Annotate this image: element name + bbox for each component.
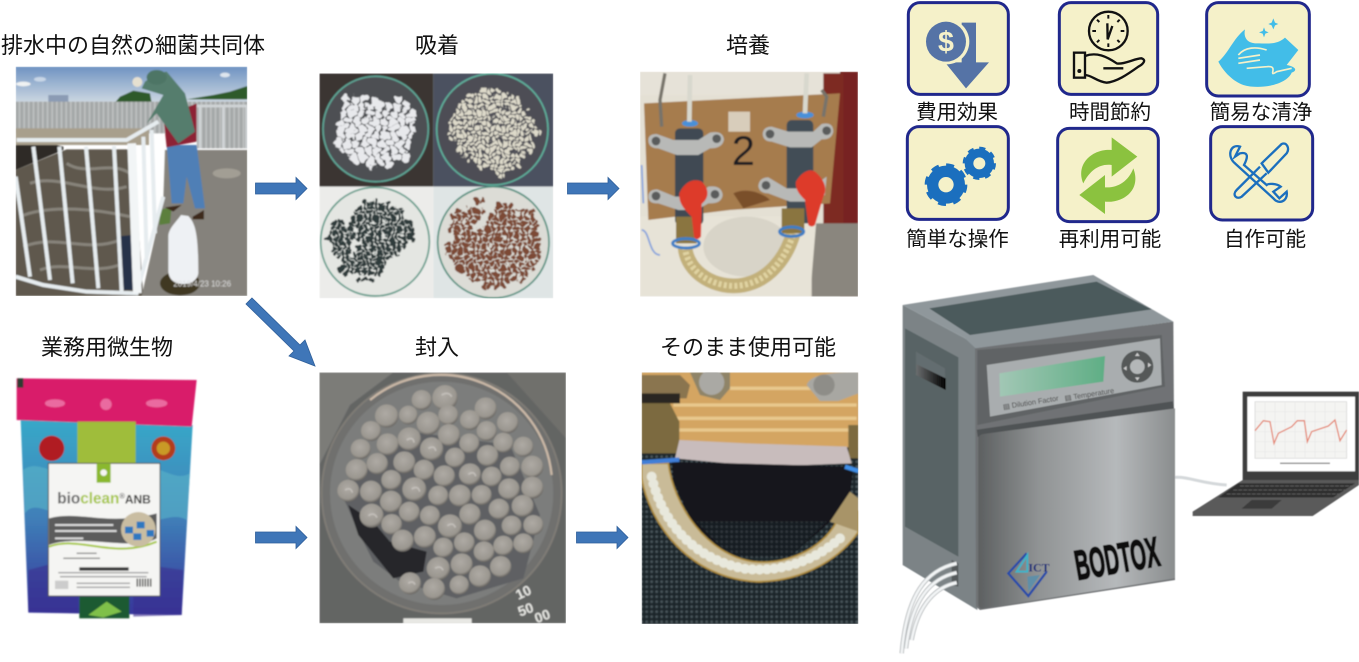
date stamp: 2019/4/23 10:26 [173, 280, 232, 289]
photo: four petri dishes of carrier media [319, 73, 553, 298]
indicator labels: ▤ Dilution Factor [1002, 394, 1060, 411]
product name: ANB [125, 492, 151, 506]
illustration: BODTOX analyser connected to laptop [902, 275, 1359, 653]
icon: reusable [1058, 128, 1158, 222]
beaker graduation marks: 50 [516, 599, 536, 619]
control panel [977, 335, 1165, 425]
device top [903, 275, 1173, 350]
icon: easy cleaning [1207, 3, 1309, 96]
beaker graduation marks: 00 [532, 606, 553, 626]
icon: cost effective [908, 3, 1008, 94]
icon: cost effective: $ [938, 27, 954, 59]
label: time saving: 時間節約 [1069, 101, 1151, 124]
label: simple operation: 簡単な操作 [906, 228, 1009, 251]
ICT logo [1008, 553, 1050, 596]
photo: valve assembly on wooden board [640, 72, 858, 297]
beige pellets [448, 90, 540, 176]
arrow: encapsulation to ready to use [576, 526, 628, 548]
BODTOX logo text: BODTOX [1071, 528, 1163, 589]
photo: ready-to-use tube with beads [642, 370, 858, 624]
label: do it yourself: 自作可能 [1224, 228, 1306, 251]
heading: encapsulation: 封入 [415, 335, 459, 360]
heading: ready to use: そのまま使用可能 [660, 335, 836, 360]
control panel: ▤ Temperature [1064, 386, 1115, 403]
icon: simple operation [907, 127, 1008, 219]
ICT logo: ICT [1028, 561, 1050, 575]
label: easy cleaning: 簡易な清浄 [1210, 101, 1312, 124]
bead highlights [345, 393, 476, 585]
brown pellets [448, 202, 540, 285]
beaker graduation marks: 10 [513, 582, 534, 603]
laptop [1193, 392, 1359, 516]
arrow: adsorption to cultivation [568, 178, 619, 200]
arrow: commercial microbes to encapsulation [256, 526, 307, 548]
label: cost effective: 費用効果 [916, 101, 998, 124]
heading: adsorption: 吸着 [415, 33, 459, 58]
photo: encapsulated beads in a beaker [319, 372, 566, 626]
icon: time saving [1059, 3, 1158, 94]
photo: wastewater sampling at treatment tank [16, 67, 247, 296]
white pellets [338, 98, 418, 164]
device side [903, 305, 977, 610]
icon: do it yourself tools [1211, 127, 1313, 220]
heading: natural bacterial consortia in wastewater: 排水中の自然の細菌共同体 [1, 33, 265, 58]
device front frame [975, 322, 1175, 610]
black pellets [330, 203, 415, 280]
photo: bioclean ANB product bag [17, 378, 197, 618]
heading: commercial microorganisms: 業務用微生物 [41, 335, 173, 360]
heading: cultivation: 培養 [726, 33, 770, 58]
product name: ® [119, 492, 125, 501]
beaker graduation marks [515, 584, 551, 624]
product name: bioclean [57, 490, 119, 507]
arrow: sampling to adsorption [256, 178, 307, 200]
handwritten number on board: 2 [732, 127, 755, 174]
panel: benefit icons [906, 3, 1313, 251]
label: reusable: 再利用可能 [1059, 228, 1161, 251]
LCD display [999, 356, 1105, 397]
arrow: sampling to encapsulation diagonal [246, 298, 315, 366]
cable [1175, 477, 1227, 485]
tubes [902, 563, 957, 653]
beads [337, 385, 543, 600]
front door [978, 408, 1175, 608]
